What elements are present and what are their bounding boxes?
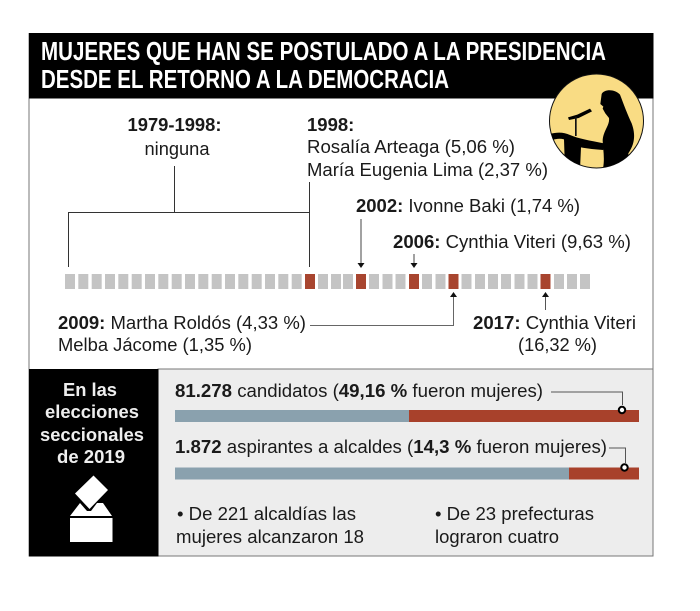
panel: 2019 statistics background	[158, 369, 653, 556]
panel: 2019 elections label: elecciones	[45, 401, 139, 422]
bar chart: candidates: 81.278 candidatos (49,16 % fueron mujeres)	[175, 380, 543, 401]
panel: 2019 elections label	[29, 369, 158, 556]
text: 1998 candidates: 1998:	[307, 114, 354, 135]
text: 1979-1998 ninguna: ninguna	[144, 138, 210, 159]
panel: outer frame	[29, 34, 653, 556]
panel: 2019 elections label: de 2019	[57, 446, 125, 467]
text: 1998 candidates: María Eugenia Lima (2,37 %)	[307, 159, 548, 180]
icon: ballot box	[70, 476, 112, 542]
panel: 2019 elections label: En las	[63, 379, 117, 400]
text: 2009 candidates	[58, 312, 306, 355]
text: 1979-1998 ninguna	[128, 114, 222, 159]
text: 2006 candidate: 2006: Cynthia Viteri (9,63 %)	[393, 231, 631, 252]
bar chart: mayoral candidates	[175, 436, 639, 480]
text: mayoralties: • De 221 alcaldías las	[177, 503, 356, 524]
text: mayoralties: mujeres alcanzaron 18	[176, 526, 364, 547]
icon: woman speaking at podium	[549, 74, 643, 170]
timeline squares	[65, 274, 590, 289]
text: prefectures: lograron cuatro	[435, 526, 559, 547]
bracket: 1979-1998 period	[68, 166, 310, 267]
text: 2009 candidates: Melba Jácome (1,35 %)	[58, 334, 252, 355]
text: 1998 candidates	[307, 114, 548, 180]
arrow: 2006	[410, 254, 418, 268]
bar chart: mayoral candidates: 1.872 aspirantes a alcaldes (14,3 % fueron mujeres)	[175, 436, 607, 457]
text: 2002 candidate: 2002: Ivonne Baki (1,74 %)	[356, 195, 580, 216]
title	[29, 33, 654, 98]
text: 2017 candidate: (16,32 %)	[518, 334, 597, 355]
text: prefectures	[435, 503, 594, 547]
text: 2017 candidate	[473, 312, 636, 355]
text: prefectures: • De 23 prefecturas	[435, 503, 594, 524]
title: DESDE EL RETORNO A LA DEMOCRACIA	[41, 64, 449, 94]
text: 2009 candidates: 2009: Martha Roldós (4,33 %)	[58, 312, 306, 333]
text: 2017 candidate: 2017: Cynthia Viteri	[473, 312, 636, 333]
panel: 2019 elections label: seccionales	[40, 424, 144, 445]
arrow: 2002	[358, 219, 364, 268]
bar chart: candidates	[175, 380, 639, 422]
arrow: 2009	[310, 292, 457, 326]
text: 1979-1998 ninguna: 1979-1998:	[128, 114, 222, 135]
arrow: 2017	[542, 292, 549, 310]
text: 1998 candidates: Rosalía Arteaga (5,06 %)	[307, 136, 515, 157]
text: mayoralties	[176, 503, 364, 547]
